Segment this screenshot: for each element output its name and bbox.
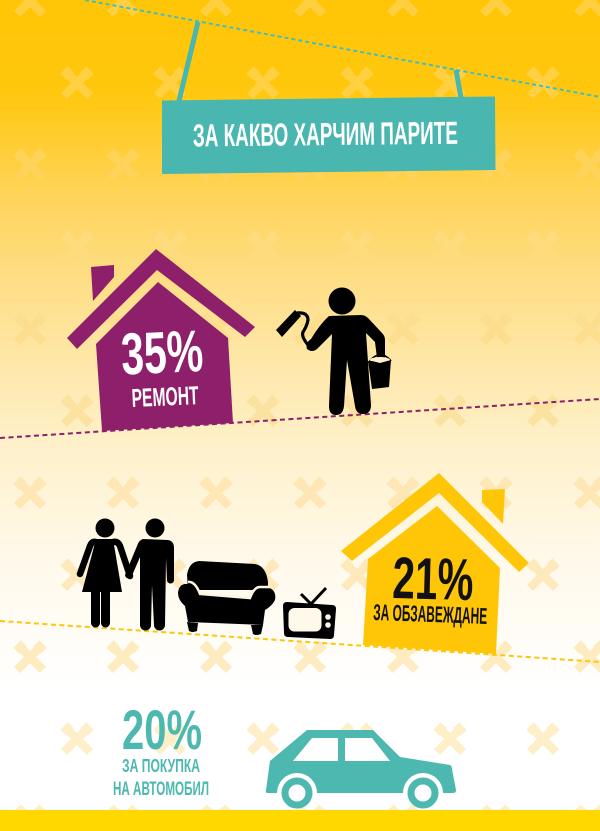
icon: television bbox=[283, 588, 336, 639]
hanging sign with title bbox=[85, 0, 600, 174]
icon: sofa bbox=[178, 561, 275, 635]
icon: painter with roller and bucket bbox=[276, 288, 391, 415]
label: ЗА ОБЗАВЕЖДАНЕ bbox=[373, 599, 488, 629]
stat: 20% car purchase bbox=[113, 698, 209, 800]
label line one: ЗА ПОКУПКА bbox=[122, 756, 200, 776]
label: РЕМОНТ bbox=[131, 380, 199, 413]
dashed line: yellow bbox=[0, 621, 600, 662]
bucket bbox=[368, 355, 391, 389]
man bbox=[125, 518, 174, 630]
percentage: 35% bbox=[120, 318, 204, 387]
icon: couple holding hands bbox=[80, 518, 174, 630]
wheel bbox=[285, 781, 309, 805]
dashed line: purple bbox=[0, 399, 600, 438]
house: 21% furnishing bbox=[341, 473, 529, 654]
house: 35% renovation bbox=[67, 249, 255, 431]
icon: car bbox=[266, 730, 456, 805]
roller bbox=[276, 310, 309, 346]
wheel bbox=[411, 781, 435, 805]
bottom bar bbox=[0, 810, 600, 831]
percentage: 20% bbox=[122, 698, 202, 761]
woman bbox=[80, 518, 130, 628]
label line two: НА АВТОМОБИЛ bbox=[113, 779, 209, 800]
percentage: 21% bbox=[392, 545, 474, 613]
